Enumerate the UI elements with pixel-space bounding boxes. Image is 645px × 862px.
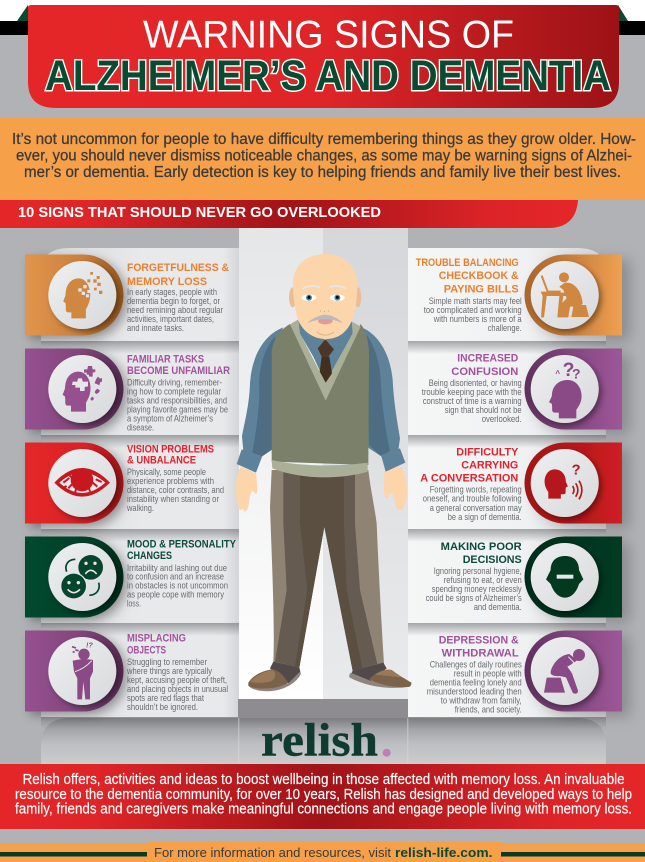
tab (25, 630, 124, 712)
body text (426, 566, 522, 612)
icon: confused person: !? (86, 640, 93, 649)
icon: head with question marks: ? (572, 365, 581, 381)
body text: Challenges of daily routines (430, 660, 522, 670)
socks and shoes (248, 662, 412, 691)
body text: Irritability and lashing out due (127, 563, 227, 573)
intro text: mer’s or dementia. Early detection is key to helping friends and family live their best lives. (24, 164, 621, 181)
body text (427, 660, 522, 714)
heading: BECOME UNFAMILIAR (127, 365, 230, 377)
body text (127, 378, 228, 433)
body text: Being disoriented, or having (429, 378, 522, 388)
body text: construct of time is a warning (423, 396, 522, 406)
body text: dementia feeling lonely and (430, 678, 522, 688)
left card backgrounds (41, 248, 239, 717)
body text: Difficulty driving, remember- (127, 378, 222, 388)
title line 1: WARNING SIGNS OF (143, 14, 514, 56)
heading (439, 635, 519, 660)
body text: refusing to eat, or even (444, 575, 522, 585)
heading: INCREASED (457, 353, 518, 365)
center column and floor (238, 228, 408, 764)
icon: head with pixels (48, 261, 116, 329)
icon: head with puzzle pieces (48, 355, 116, 423)
shirt collar (298, 320, 353, 383)
body text: Simple math starts may feel (429, 296, 522, 306)
bottom base panel (41, 711, 606, 764)
section heading strip: 10 SIGNS THAT SHOULD NEVER GO OVERLOOKED (18, 205, 381, 221)
body text (422, 378, 522, 424)
tab (524, 254, 622, 336)
panel: trouble balancing (416, 254, 622, 336)
body text: tasks and responsibilities, and (127, 396, 227, 406)
body text: with numbers is more of a (433, 314, 522, 324)
body text: Struggling to remember (127, 657, 207, 667)
right hand (384, 467, 407, 510)
trousers (270, 470, 384, 671)
body text: too complicated and working (424, 305, 522, 315)
heading: CHANGES (127, 550, 172, 562)
body text: instability when standing or (127, 494, 219, 504)
heading: CONFUSION (451, 366, 518, 378)
footer text: For more information and resources, visit (154, 845, 391, 860)
footer bar (0, 842, 645, 862)
tab (524, 536, 622, 618)
body text: to withdraw from family, (441, 696, 522, 706)
body text: to confusion and an increase (127, 572, 224, 582)
heading: FAMILIAR TASKS (127, 354, 204, 366)
icon: head with question marks: ^ (555, 369, 560, 378)
body text: disease. (127, 423, 154, 433)
tab (25, 348, 124, 430)
tab (25, 442, 124, 524)
body text: sign that should not be (445, 405, 522, 415)
heading: PAYING BILLS (444, 284, 519, 296)
panel: vision problems (25, 442, 224, 524)
icon: bloodshot eye (48, 449, 116, 517)
heading: VISION PROBLEMS (127, 444, 214, 456)
panel: increased confusion (422, 348, 622, 430)
body text: need remining about regular (127, 305, 223, 315)
heading: WITHDRAWAL (442, 648, 519, 660)
icon: confused person (48, 637, 116, 705)
heading: DECISIONS (463, 554, 522, 566)
body text: kept, accusing people of theft, (127, 675, 227, 685)
body text: trouble keeping pace with the (422, 387, 522, 397)
heading: MOOD & PERSONALITY (127, 539, 237, 551)
heading: A CONVERSATION (420, 473, 518, 485)
intro text: ever, you should never dismiss noticeable changes, as some may be warning signs of Alzhei- (16, 148, 632, 164)
heading (127, 262, 229, 288)
heading (127, 633, 186, 657)
heading: MAKING POOR (441, 541, 522, 553)
tab (524, 630, 622, 712)
body text: could be signs of Alzheimer’s (426, 593, 522, 603)
heading (451, 353, 518, 378)
body text: ing how to complete regular (127, 387, 221, 397)
section heading strip (0, 200, 578, 228)
icon: speaking head: ? (572, 462, 581, 478)
vest neckline trim (290, 319, 361, 401)
body text: dementia begin to forget, or (127, 296, 220, 306)
tab (25, 254, 124, 336)
heading: MEMORY LOSS (127, 276, 207, 288)
heading (416, 257, 519, 296)
body text: oneself, and trouble following (423, 494, 522, 504)
icon: speaking head (531, 449, 599, 517)
right card backgrounds (408, 248, 606, 717)
panel: familiar tasks (25, 348, 230, 433)
left hand (236, 467, 257, 512)
heading (420, 447, 519, 485)
closing statement band (0, 764, 645, 829)
intro text (12, 131, 636, 181)
body text (126, 467, 224, 513)
body text (424, 296, 522, 333)
panel: forgetfulness (25, 254, 229, 336)
relish logo: relish (261, 714, 378, 766)
body text: spending money recklessly (432, 584, 522, 594)
heading (127, 444, 214, 467)
heading: CHECKBOOK & (439, 270, 519, 282)
moustache (307, 315, 343, 323)
body text: and dementia. (474, 602, 522, 612)
body text (126, 657, 228, 712)
title banner (17, 5, 628, 108)
body text: result in people with (454, 669, 522, 679)
panel: misplacing objects (25, 630, 228, 712)
icon: sad and happy faces (48, 543, 116, 611)
shirt sleeves (237, 327, 405, 473)
heading: MISPLACING (127, 633, 186, 645)
body text: walking. (126, 503, 154, 513)
body text: spots are red flags that (127, 693, 204, 703)
panel: depression and withdrawal (427, 630, 622, 714)
heading: DIFFICULTY (456, 447, 519, 459)
icon: head with question marks: ? (563, 360, 574, 381)
heading: FORGETFULNESS & (127, 262, 229, 274)
heading (127, 539, 237, 562)
tab (524, 348, 622, 430)
body text: in obstacles is not uncommon (127, 580, 228, 590)
body text: experience problems with (127, 476, 214, 486)
intro text: It’s not uncommon for people to have difficulty remembering things as they grow older. How- (12, 131, 636, 148)
icon: head with blank slot (531, 543, 599, 611)
body text: shouldn’t be ignored. (127, 702, 198, 712)
body text: challenge. (488, 323, 522, 333)
body text: a general conversation may (430, 503, 522, 513)
body text: activities, important dates, (127, 314, 214, 324)
body text: as people cope with memory (127, 590, 224, 600)
heading: OBJECTS (127, 645, 166, 657)
body text: and placing objects in unusual (127, 684, 228, 694)
closing text (15, 772, 632, 818)
head (289, 254, 361, 339)
panel: difficulty carrying a conversation (420, 442, 622, 524)
tab (25, 536, 124, 618)
body text: and innate tasks. (127, 323, 184, 333)
tie (318, 339, 334, 383)
body text: playing favorite games may be (127, 405, 228, 415)
heading: TROUBLE BALANCING (416, 257, 519, 269)
body text: Forgetting words, repeating (430, 485, 522, 495)
heading: DEPRESSION & (439, 635, 519, 647)
body text: friends, and society. (455, 704, 522, 714)
footer text: relish-life.com. (395, 845, 492, 860)
body text: be a sign of dementia. (448, 512, 522, 522)
body text (127, 563, 228, 608)
illustration: elderly man (236, 254, 412, 691)
heading (441, 541, 522, 566)
body text: misunderstood leading then (427, 687, 522, 697)
intro panel (0, 118, 645, 200)
heading (127, 354, 230, 377)
panel: making poor decisions (426, 536, 622, 618)
sweater vest (272, 324, 369, 477)
icon: person with head in hands (531, 637, 599, 705)
body text: where things are typically (126, 666, 212, 676)
body text: overlooked. (482, 414, 522, 424)
body text: distance, color contrasts, and (127, 485, 224, 495)
body text: Physically, some people (127, 467, 206, 477)
body text: loss. (127, 598, 141, 608)
heading: CARRYING (461, 460, 518, 472)
tab (524, 442, 622, 524)
body text (127, 287, 223, 333)
body text (423, 485, 522, 522)
icon: head with question marks (531, 355, 599, 423)
heading: & UNBALANCE (127, 455, 196, 467)
body text: In early stages, people with (127, 287, 217, 297)
icon: person at laptop (531, 261, 599, 329)
body text: a symptom of Alzheimer’s (127, 414, 213, 424)
body text: Ignoring personal hygiene, (434, 566, 522, 576)
panel: mood and personality (25, 536, 237, 618)
